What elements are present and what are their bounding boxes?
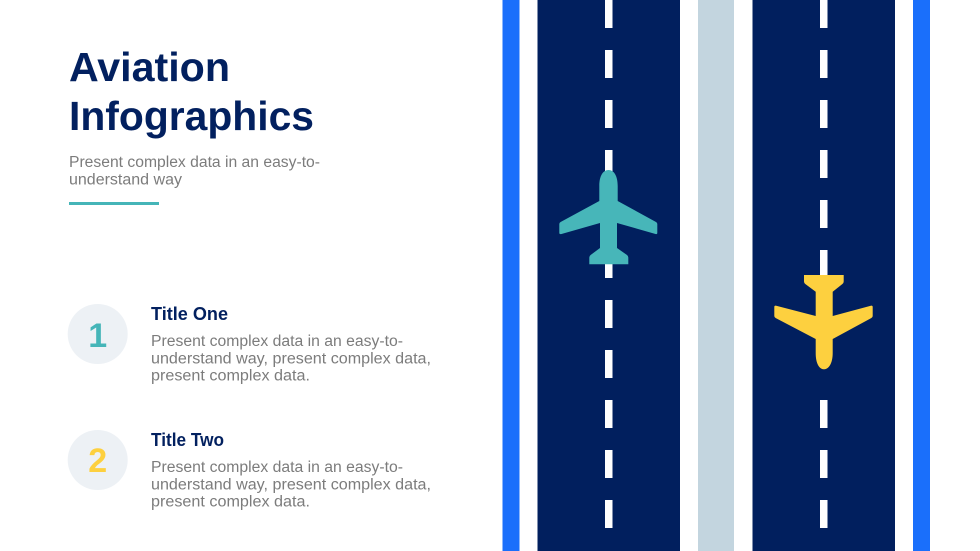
text block: item 1 description [151,333,431,384]
text block: item 2 description: Present complex data in an easy-to- [151,459,403,476]
badge: number 1: 1 [88,317,107,355]
icon: teal airplane heading up [559,170,657,264]
text block: item 2 description [151,459,431,510]
text block: item 2 description: present complex data. [151,494,310,510]
badge: number 2: 2 [88,442,107,480]
heading: Title One: Title One [151,304,228,324]
runway 1 [538,0,680,551]
subtitle: understand way [69,172,182,188]
title: Infographics [69,93,314,139]
text block: item 1 description: present complex data. [151,368,310,384]
right blue edge stripe [913,0,930,551]
icon: yellow airplane heading down [774,275,873,369]
title [69,44,314,139]
title: Aviation [69,44,230,90]
subtitle: Present complex data in an easy-to- [69,154,320,171]
heading: Title Two: Title Two [151,430,224,450]
text block: item 2 description: understand way, present complex data, [151,476,431,494]
runway 2 [752,0,895,551]
item 2 [68,430,431,510]
grass median [698,0,734,551]
title underline accent [69,202,159,205]
text block: item 1 description: Present complex data in an easy-to- [151,333,403,350]
badge: number 2 [68,430,128,490]
item 1 [68,304,431,384]
subtitle [69,154,320,188]
badge: number 1 [68,304,128,364]
left blue edge stripe [502,0,520,551]
text block: item 1 description: understand way, present complex data, [151,350,431,368]
